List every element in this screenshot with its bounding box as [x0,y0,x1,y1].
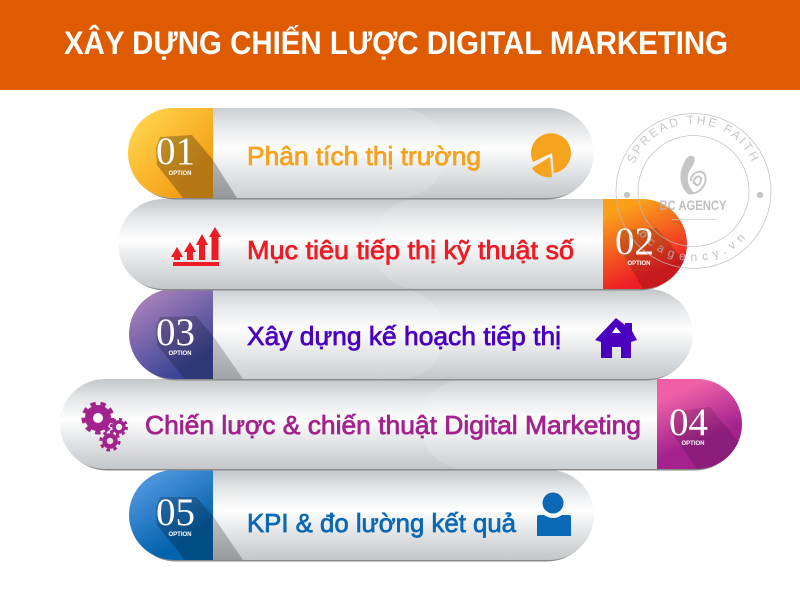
panel: 04 strategy [60,379,745,470]
header banner [0,0,800,90]
option label 01: OPTION [168,171,192,177]
number 01: 01 [156,130,195,173]
icon: house [595,318,637,358]
watermark stamp [616,113,772,269]
label 04: Chiến lược & chiến thuật Digital Marketing [145,410,641,440]
watermark stamp: bcagency.vn [639,228,745,262]
icon: rising arrows [171,227,221,266]
watermark stamp: SPREAD THE FAITH [628,116,759,163]
icon: gears [84,404,127,450]
option label 03: OPTION [168,351,192,357]
watermark stamp: BC AGENCY [660,197,727,213]
number 05: 05 [156,491,195,534]
panel: 01 market analysis [128,108,594,200]
panel: 05 KPI [129,470,594,562]
title: XÂY DỰNG CHIẾN LƯỢC DIGITAL MARKETING [64,25,728,61]
option label 04: OPTION [681,441,705,447]
icon: person [537,492,571,536]
panel: 03 plan [129,289,693,380]
number 04: 04 [669,401,708,444]
label 02: Mục tiêu tiếp thị kỹ thuật số [247,235,574,265]
label 03: Xây dựng kế hoạch tiếp thị [247,321,561,351]
icon: pie chart [531,133,571,177]
option label 05: OPTION [168,532,192,538]
number 02: 02 [615,220,654,263]
panel: 02 digital goals [118,199,700,290]
label 05: KPI & đo lường kết quả [247,508,517,538]
number 03: 03 [156,311,195,354]
option label 02: OPTION [627,261,651,267]
label 01: Phân tích thị trường [247,141,481,171]
